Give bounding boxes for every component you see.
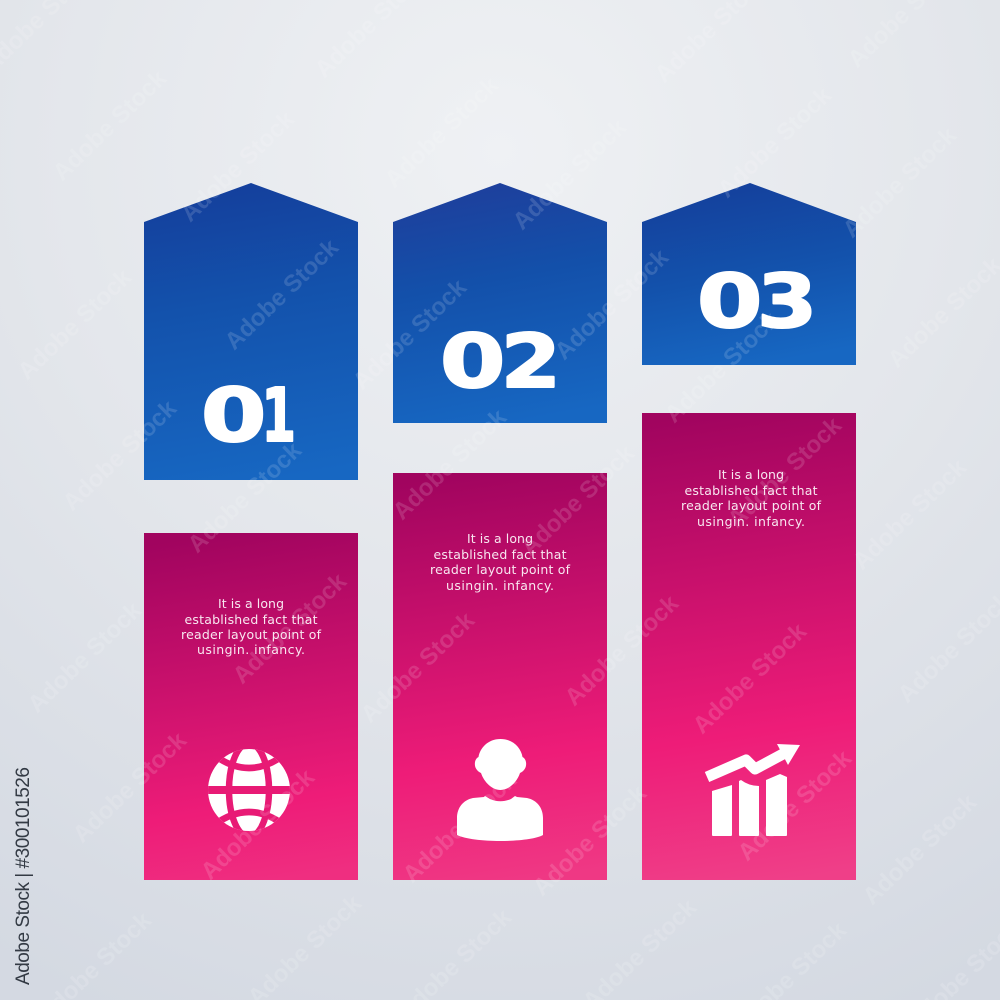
text block 3 bbox=[681, 467, 822, 529]
text block 3: usingin. infancy. bbox=[697, 514, 805, 529]
text block 2: reader layout point of bbox=[430, 562, 571, 577]
watermark: Adobe Stock repeats: Adobe Stock bbox=[176, 105, 300, 227]
text block 3: established fact that bbox=[684, 483, 818, 498]
watermark: Adobe Stock repeats: Adobe Stock bbox=[356, 606, 480, 728]
watermark: Adobe Stock repeats: Adobe Stock bbox=[713, 81, 837, 203]
watermark: Adobe Stock repeats: Adobe Stock bbox=[528, 779, 652, 901]
number 03 bbox=[697, 258, 817, 344]
text block 2: usingin. infancy. bbox=[446, 578, 554, 593]
watermark: Adobe Stock repeats: Adobe Stock bbox=[348, 273, 472, 395]
text block 1 bbox=[181, 596, 322, 657]
number 01: 1 bbox=[262, 373, 296, 459]
icon: growth chart bbox=[707, 744, 800, 836]
number 02 bbox=[440, 318, 561, 404]
pink panel 2 bbox=[393, 473, 607, 880]
pink panel 3 bbox=[642, 413, 856, 880]
panel: column 1 bbox=[144, 183, 358, 880]
watermark: Adobe Stock repeats: Adobe Stock bbox=[388, 403, 512, 525]
watermark: Adobe Stock repeats: Adobe Stock bbox=[48, 64, 172, 186]
panel: column 3 bbox=[642, 183, 856, 880]
stock id label: Adobe Stock | #300101526 bbox=[13, 767, 34, 985]
watermark: Adobe Stock repeats: Adobe Stock bbox=[560, 589, 684, 711]
pink panel 1 bbox=[144, 533, 358, 880]
number 01: 0 bbox=[201, 372, 266, 458]
text block 1: established fact that bbox=[184, 612, 318, 627]
number 01 bbox=[201, 372, 296, 459]
arrow block 2 bbox=[393, 183, 607, 423]
watermark: Adobe Stock repeats: Adobe Stock bbox=[858, 788, 982, 910]
watermark: Adobe Stock repeats: Adobe Stock bbox=[508, 113, 632, 235]
watermark: Adobe Stock repeats: Adobe Stock bbox=[183, 436, 307, 558]
watermark: Adobe Stock repeats: Adobe Stock bbox=[220, 233, 344, 355]
text block 3: It is a long bbox=[718, 467, 784, 482]
text block 1: It is a long bbox=[218, 596, 284, 611]
number 02: 2 bbox=[501, 318, 561, 404]
text block 1: reader layout point of bbox=[181, 627, 322, 642]
watermark: Adobe Stock repeats: Adobe Stock bbox=[196, 763, 320, 885]
icon: person bbox=[457, 739, 543, 841]
panel: column 2 bbox=[393, 183, 607, 880]
watermark: Adobe Stock repeats: Adobe Stock bbox=[58, 394, 182, 516]
watermark: Adobe Stock repeats: Adobe Stock bbox=[516, 439, 640, 561]
watermark: Adobe Stock repeats: Adobe Stock bbox=[550, 243, 674, 365]
watermark: Adobe Stock repeats: Adobe Stock bbox=[398, 766, 522, 888]
text block 2: It is a long bbox=[467, 531, 533, 546]
watermark: Adobe Stock repeats: Adobe Stock bbox=[838, 121, 962, 243]
icon: globe bbox=[208, 749, 290, 831]
text block 2 bbox=[430, 531, 571, 593]
watermark: Adobe Stock repeats: Adobe Stock bbox=[228, 567, 352, 689]
watermark: Adobe Stock repeats: Adobe Stock bbox=[380, 71, 504, 193]
text block 1: usingin. infancy. bbox=[197, 642, 305, 657]
text block 2: established fact that bbox=[434, 547, 567, 562]
watermark: Adobe Stock repeats: Adobe Stock bbox=[733, 744, 857, 866]
watermark: Adobe Stock repeats: Adobe Stock bbox=[23, 596, 147, 718]
number 03: 0 bbox=[697, 258, 762, 344]
watermark: Adobe Stock repeats: Adobe Stock bbox=[723, 411, 847, 533]
number 03: 3 bbox=[757, 258, 817, 344]
watermark: Adobe Stock repeats: Adobe Stock bbox=[848, 453, 972, 575]
number 02: 0 bbox=[440, 318, 505, 404]
arrow block 1 bbox=[144, 183, 358, 480]
watermark: Adobe Stock repeats: Adobe Stock bbox=[13, 263, 137, 385]
text block 3: reader layout point of bbox=[681, 498, 822, 513]
watermark: Adobe Stock repeats: Adobe Stock bbox=[660, 306, 784, 428]
watermark: Adobe Stock repeats: Adobe Stock bbox=[68, 726, 192, 848]
arrow block 3 bbox=[642, 183, 856, 365]
watermark: Adobe Stock repeats: Adobe Stock bbox=[688, 617, 812, 739]
